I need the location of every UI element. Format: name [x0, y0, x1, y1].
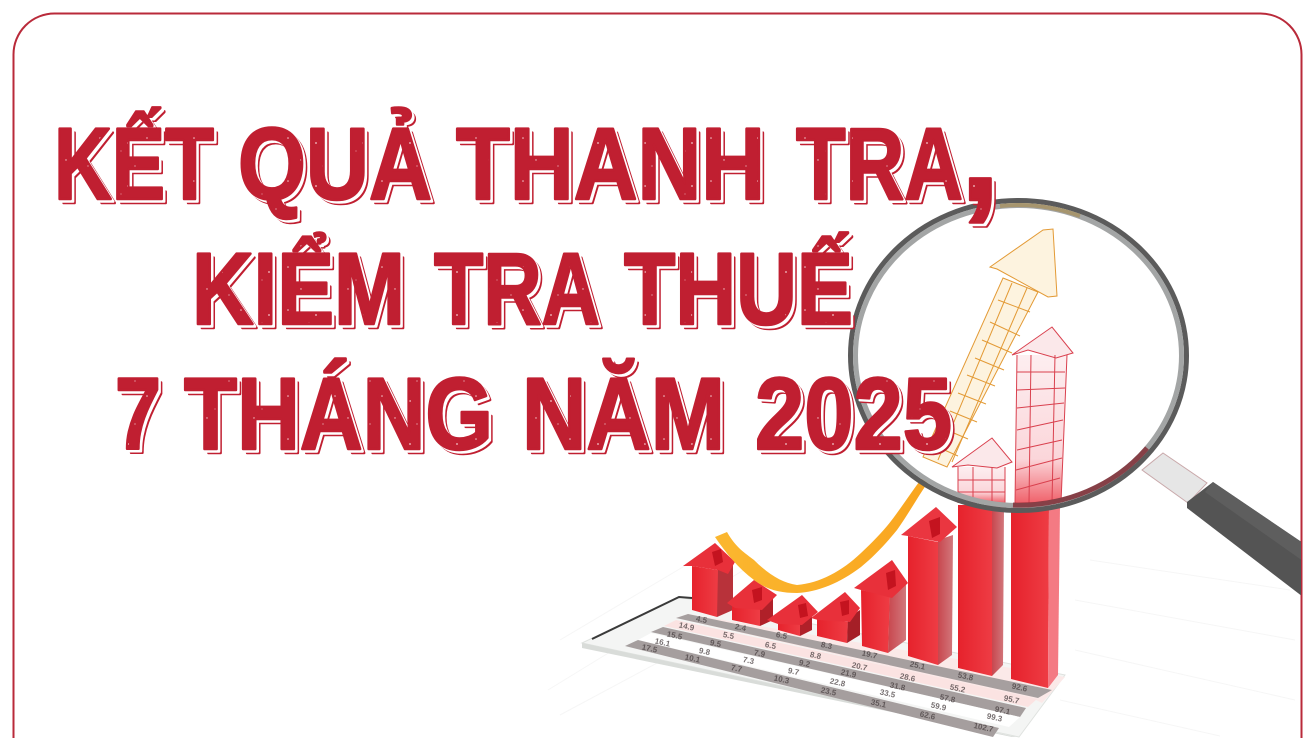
bar 8 — [1011, 505, 1060, 688]
table numbers: 99.3 — [986, 712, 1004, 724]
table numbers: 9.2 — [798, 658, 811, 669]
table numbers: 31.8 — [889, 681, 907, 693]
table numbers: 22.8 — [829, 677, 847, 689]
table numbers: 6.5 — [764, 640, 777, 651]
table numbers: 17.5 — [641, 643, 659, 655]
table numbers: 7.3 — [742, 655, 755, 666]
table numbers: 21.9 — [840, 668, 858, 680]
bar 7 — [958, 505, 1004, 676]
table numbers: 55.2 — [949, 683, 967, 695]
bar 2 — [727, 580, 777, 626]
table numbers: 7.7 — [730, 663, 743, 674]
line 2: THUẾ — [624, 232, 853, 346]
table numbers: 23.5 — [820, 686, 838, 698]
chart: orange curve — [715, 478, 928, 593]
line 1: THANH — [456, 107, 765, 221]
title — [54, 69, 1000, 471]
line 2: TRA — [434, 232, 600, 346]
line 2 — [192, 232, 853, 346]
chart: data table base — [582, 597, 1065, 737]
wireframe small house in lens — [952, 438, 1012, 503]
table numbers: 53.8 — [957, 671, 975, 683]
table rows — [625, 614, 1052, 737]
line 1: QUẢ — [238, 107, 432, 221]
bar 4 — [811, 592, 860, 643]
line 1: , — [960, 69, 1000, 231]
table numbers: 10.3 — [773, 674, 791, 686]
table numbers: 28.6 — [899, 672, 917, 684]
table numbers: 59.9 — [930, 701, 948, 713]
chart: house bars — [683, 505, 1060, 688]
table numbers: 9.5 — [709, 638, 722, 649]
table numbers: 19.7 — [861, 649, 879, 661]
line 1 — [54, 69, 1000, 231]
line 2: KIỂM — [192, 232, 405, 346]
table numbers: 20.7 — [851, 661, 869, 673]
table numbers: 57.8 — [939, 693, 957, 705]
table numbers: 8.8 — [809, 650, 822, 661]
table numbers: 4.5 — [695, 614, 708, 625]
table numbers: 5.5 — [722, 630, 735, 641]
table numbers: 16.1 — [654, 637, 672, 649]
lens ring — [850, 200, 1186, 510]
table numbers: 35.1 — [870, 698, 888, 710]
wireframe arrow in lens — [923, 229, 1057, 467]
table numbers: 15.5 — [666, 630, 684, 642]
line 3: 7 — [115, 357, 161, 471]
table numbers: 62.6 — [919, 710, 937, 722]
line 1: TRA — [796, 107, 963, 221]
table numbers: 9.8 — [698, 646, 711, 657]
table numbers: 97.1 — [994, 705, 1012, 717]
bar 5 — [854, 560, 908, 653]
table numbers: 95.7 — [1003, 694, 1021, 706]
table numbers: 8.3 — [820, 640, 833, 651]
line 1: KẾT — [54, 107, 214, 221]
table numbers: 6.5 — [775, 630, 788, 641]
handle — [1141, 452, 1301, 596]
table numbers: 92.6 — [1011, 682, 1029, 694]
wireframe tall house in lens — [1012, 327, 1073, 503]
table numbers: 33.5 — [879, 688, 897, 700]
line 3: 2025 — [755, 357, 952, 471]
table numbers: 25.1 — [909, 660, 927, 672]
bar 1 — [683, 543, 735, 617]
table numbers: 9.7 — [787, 666, 800, 677]
table numbers: 14.9 — [678, 621, 696, 633]
line 3 — [115, 357, 952, 471]
table numbers — [641, 614, 1029, 734]
table numbers: 102.7 — [973, 721, 995, 734]
magnifying glass — [850, 200, 1313, 610]
table numbers: 7.9 — [753, 648, 766, 659]
bar 3 — [767, 595, 818, 636]
bar 6 — [901, 507, 957, 665]
table numbers: 10.1 — [684, 653, 702, 665]
line 3: THÁNG — [184, 357, 493, 471]
table numbers: 2.4 — [734, 622, 747, 633]
line 3: NĂM — [522, 357, 725, 471]
